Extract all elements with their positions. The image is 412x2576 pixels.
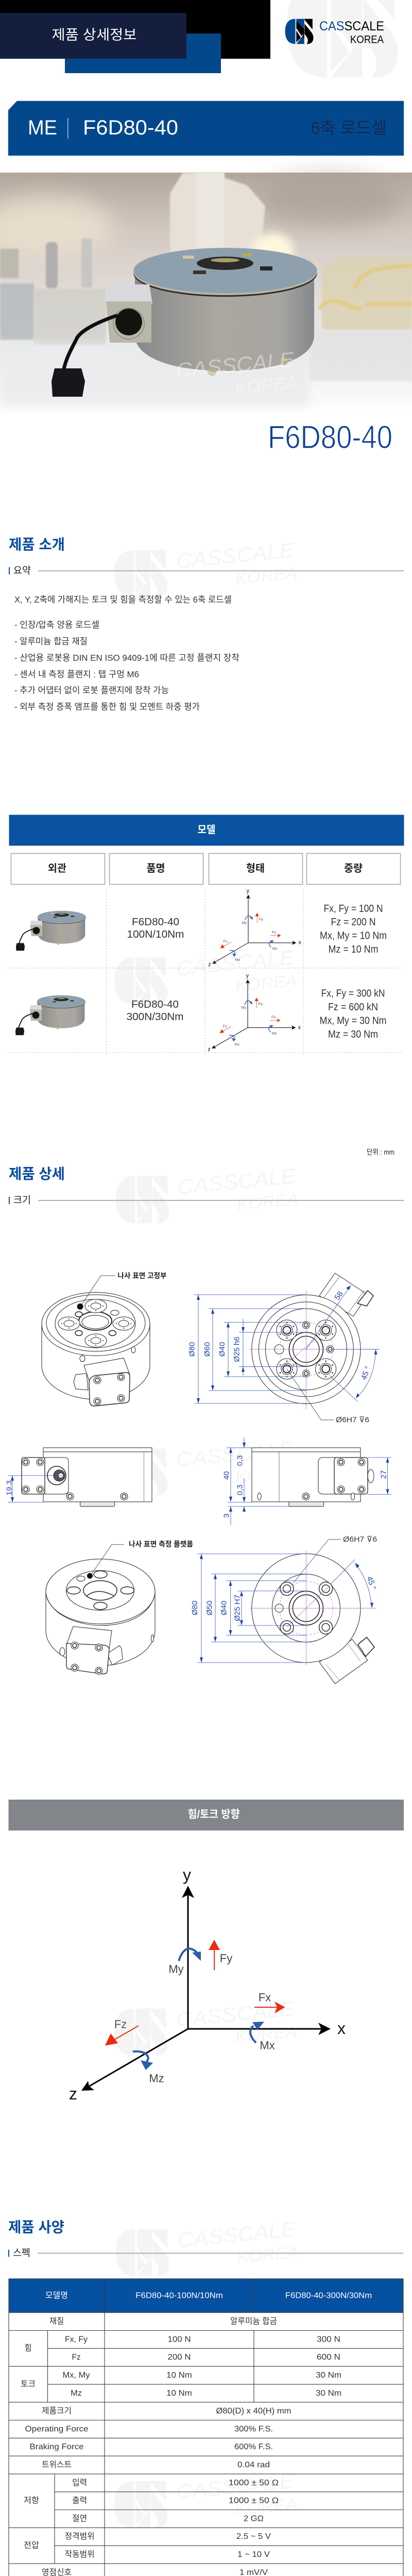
summary text: X, Y, Z축에 가해지는 토크 및 힘을 측정할 수 있는 6축 로드셀 — [14, 595, 232, 605]
model table header cells — [11, 853, 401, 884]
spec rows: resistance and voltage — [24, 2478, 279, 2559]
spec rows: resistance and voltage: 절연 — [72, 2514, 87, 2523]
header title: 제품 상세정보 — [52, 27, 137, 43]
model 1 axis diagram: Mz — [235, 957, 241, 962]
spec rows: resistance and voltage: 1000 ± 50 Ω — [229, 2479, 279, 2487]
brand logo — [285, 19, 384, 45]
spec rows: material and capacity: 토크 — [21, 2380, 36, 2388]
brand logo: KOREA — [350, 34, 384, 45]
background watermarks: CASSCALE — [177, 1165, 297, 1199]
summary text: - 센서 내 측정 플랜지 : 탭 구멍 M6 — [14, 670, 139, 679]
model 2 capacity: Mx, My = 30 Nm — [319, 1015, 386, 1026]
model 1 name — [127, 917, 184, 940]
spec rows: size and mechanical: 300% F.S. — [234, 2425, 273, 2434]
model 2 axis diagram: Fy — [259, 1002, 263, 1006]
spec rows: material and capacity: Fx, Fy — [65, 2335, 88, 2344]
drawing: isometric fixed side — [42, 1272, 167, 1406]
model table dotted grid — [7, 889, 402, 1055]
model 1 axis diagram: Fz — [224, 939, 228, 943]
unit note: 단위 : mm — [367, 1148, 394, 1156]
model 1 thumbnail — [16, 911, 86, 951]
spec rows: material and capacity: 300 N — [317, 2335, 340, 2344]
spec rows: material and capacity: 600 N — [317, 2353, 340, 2362]
force/torque axis diagram: Fz — [114, 2018, 127, 2031]
spec table header: F6D80-40-100N/10Nm — [135, 2292, 223, 2300]
force/torque axis diagram: Mx — [260, 2039, 275, 2052]
model 2 capacity: Mz = 30 Nm — [328, 1029, 378, 1040]
spec rows: material and capacity: 알루미늄 합금 — [230, 2316, 277, 2326]
drawing: bottom view with dimensions: Ø25 H7 — [233, 1595, 242, 1621]
model 2 capacity — [319, 988, 386, 1040]
model 1 axis diagram: Mx — [272, 946, 278, 951]
spec rows: resistance and voltage: 전압 — [24, 2541, 39, 2550]
drawing: top view with dimensions: Ø25 h6 — [233, 1336, 241, 1362]
drawing: top view with dimensions: Ø6H7 ⊽6 — [336, 1416, 369, 1424]
model 2 axis diagram: My — [241, 1005, 246, 1010]
model 1 axis diagram: Fy — [259, 917, 263, 921]
force/torque axis diagram: z — [69, 2084, 77, 2103]
model title bar: 6축 로드셀 — [311, 118, 387, 137]
model 2 capacity: Fz = 600 kN — [328, 1002, 378, 1013]
force/torque axis diagram: x — [337, 2019, 346, 2038]
model 2 axis diagram: Fx — [271, 1015, 276, 1020]
model title bar: F6D80-40 — [83, 116, 178, 139]
spec rows: size and mechanical: Operating Force — [25, 2425, 89, 2434]
spec rows: material and capacity: 200 N — [168, 2353, 191, 2362]
spec table header: 모델명 — [45, 2291, 68, 2300]
spec rows: material and capacity: 30 Nm — [316, 2371, 341, 2380]
drawing: top view with dimensions: Ø40 — [218, 1342, 227, 1357]
hero watermark: CASSCALE — [175, 348, 296, 382]
background watermarks: KOREA — [234, 564, 298, 588]
spec rows: resistance and voltage: 2.5 ~ 5 V — [236, 2532, 271, 2541]
force/torque axis diagram: y — [183, 1866, 191, 1884]
model 1 axis diagram — [208, 888, 302, 968]
drawing: isometric measuring side — [46, 1540, 193, 1674]
background watermarks: CASSCALE — [175, 946, 296, 980]
spec rows: resistance and voltage: 저항 — [24, 2496, 39, 2505]
force/torque direction bar — [8, 1800, 404, 1831]
spec rows: material and capacity: 10 Nm — [166, 2371, 192, 2380]
force/torque axis diagram: Fy — [220, 1952, 232, 1965]
model 1 name: 100N/10Nm — [127, 929, 184, 940]
force/torque axis diagram — [69, 1866, 346, 2103]
model 1 capacity: Fz = 200 N — [331, 917, 376, 928]
spec table header — [9, 2279, 403, 2313]
spec rows: material and capacity: Mz — [71, 2389, 82, 2398]
force/torque direction bar: 힘/토크 방향 — [187, 1808, 240, 1821]
drawing: bottom view with dimensions: 45 ° — [365, 1575, 378, 1591]
force/torque axis diagram: Mz — [149, 2072, 164, 2084]
spec rows: resistance and voltage: 입력 — [72, 2478, 87, 2487]
spec rows: size and mechanical: Braking Force — [30, 2443, 84, 2451]
model 2 name: F6D80-40 — [131, 999, 179, 1010]
force/torque axis diagram: Fx — [259, 1991, 271, 2004]
model table bar: 모델 — [198, 824, 215, 836]
background watermarks — [114, 539, 299, 2576]
label: 나사 표면 측정 플랫폼 — [129, 1540, 193, 1548]
drawing: right side view: 27 — [379, 1470, 388, 1479]
product photo: load cell — [52, 248, 317, 397]
drawing: bottom view with dimensions: Ø80 — [191, 1601, 199, 1615]
model 2 axis diagram: Fz — [223, 1024, 227, 1028]
hero image: industrial plant with load cell — [0, 173, 412, 410]
hero watermark: KOREA — [234, 373, 298, 397]
drawing: right side view: 40 — [222, 1471, 231, 1480]
sub heading: size: 크기 — [13, 1194, 31, 1206]
brand logo: CASSCALE — [319, 19, 384, 33]
spec rows: size and mechanical — [25, 2406, 291, 2469]
background watermarks: KOREA — [234, 2495, 298, 2519]
spec rows: material and capacity: 힘 — [25, 2343, 32, 2352]
background watermarks: KOREA — [234, 2022, 298, 2046]
summary text: - 산업용 로봇용 DIN EN ISO 9409-1에 따른 고정 플랜지 장착 — [14, 653, 239, 663]
model title bar: ME — [28, 116, 57, 139]
model 2 axis diagram: z — [208, 1046, 211, 1053]
model 2 name — [127, 999, 183, 1023]
background watermarks: CASSCALE — [175, 2470, 296, 2504]
model 1 capacity: Fx, Fy = 100 N — [323, 903, 383, 914]
spec rows: resistance and voltage: 1 ~ 10 V — [237, 2550, 270, 2559]
large model name: F6D80-40 — [268, 419, 392, 455]
background watermarks: CASSCALE — [175, 1997, 296, 2031]
drawing: top view with dimensions: Ø60 — [203, 1342, 212, 1357]
background watermarks: CASSCALE — [175, 1437, 296, 1471]
section heading: product spec: 제품 사양 — [8, 2219, 64, 2235]
model table bar — [9, 815, 404, 846]
drawing: top view with dimensions: 58 — [333, 1290, 345, 1302]
spec rows: size and mechanical: 0.04 rad — [237, 2461, 270, 2469]
model table header labels: 중량 — [344, 862, 363, 874]
summary text: - 외부 측정 증폭 앰프를 통한 힘 및 모멘트 하중 평가 — [14, 702, 200, 712]
model title bar — [8, 101, 404, 156]
spec rows: material and capacity: Fz — [72, 2353, 80, 2362]
drawing: bottom view with dimensions — [191, 1535, 378, 1684]
sub heading: summary: 요약 — [13, 565, 31, 576]
model table header labels: 외관 — [48, 862, 66, 874]
drawing: right side view: 0,3 — [236, 1455, 244, 1466]
summary text — [14, 595, 239, 712]
spec rows: material and capacity: 10 Nm — [166, 2389, 192, 2398]
model 2 capacity: Fx, Fy = 300 kN — [321, 988, 385, 999]
spec rows: size and mechanical: 제품크기 — [42, 2406, 72, 2415]
hero watermark — [175, 348, 298, 397]
model 2 axis diagram: x — [298, 1024, 301, 1030]
label: 나사 표면 고정부 — [117, 1272, 167, 1280]
spec rows: material and capacity: 재질 — [49, 2316, 64, 2326]
model 2 axis diagram — [208, 973, 301, 1053]
model 2 name: 300N/30Nm — [127, 1011, 183, 1023]
drawing: top view with dimensions — [187, 1273, 380, 1424]
model table header labels: 품명 — [146, 862, 165, 874]
spec rows: resistance and voltage: 2 GΩ — [244, 2514, 264, 2523]
background watermarks: KOREA — [236, 2243, 299, 2267]
model 1 axis diagram: My — [242, 920, 247, 925]
spec rows: resistance and voltage: 작동범위 — [65, 2550, 95, 2559]
section heading: product detail: 제품 상세 — [9, 1166, 65, 1182]
model 1 axis diagram: x — [299, 940, 302, 946]
model 2 axis diagram: Mx — [272, 1031, 277, 1036]
spec rows: size and mechanical: 트위스트 — [42, 2460, 72, 2469]
sub heading: spec: 스펙 — [13, 2247, 30, 2259]
drawing: right side view — [222, 1437, 391, 1525]
background watermarks: KOREA — [236, 1190, 299, 1214]
drawing: right side view: 3 — [222, 1514, 231, 1518]
spec rows: resistance and voltage: 1000 ± 50 Ω — [229, 2497, 279, 2505]
spec rows: performance — [34, 2568, 286, 2576]
model 1 capacity — [320, 903, 387, 955]
summary text: - 알루미늄 합금 재질 — [14, 637, 88, 646]
section heading: product intro: 제품 소개 — [9, 537, 65, 552]
drawing: top view with dimensions: Ø80 — [187, 1342, 197, 1357]
model table header labels — [48, 862, 363, 874]
background watermarks: CASSCALE — [175, 539, 296, 573]
model 2 axis diagram: Mz — [235, 1042, 240, 1046]
background watermarks: KOREA — [234, 971, 298, 995]
drawing: bottom view with dimensions: Ø6H7 ⊽6 — [343, 1535, 377, 1544]
drawing: right side view: 0,3 — [236, 1485, 244, 1495]
drawing: left side view — [5, 1448, 152, 1506]
spec table header: F6D80-40-300N/30Nm — [285, 2292, 372, 2300]
spec rows: size and mechanical: Ø80(D) x 40(H) mm — [216, 2407, 291, 2415]
spec rows: resistance and voltage: 정격범위 — [65, 2532, 95, 2541]
spec rows: material and capacity — [21, 2316, 341, 2398]
model 1 capacity: Mx, My = 10 Nm — [320, 930, 387, 942]
summary text: - 추가 어댑터 없이 로봇 플랜지에 장착 가능 — [14, 685, 169, 696]
model table header labels: 형태 — [246, 862, 265, 874]
header band — [0, 0, 270, 73]
model 2 thumbnail — [15, 995, 85, 1035]
model 1 name: F6D80-40 — [132, 917, 179, 928]
spec rows: material and capacity: Mx, My — [63, 2371, 90, 2380]
brand watermark logo — [287, 0, 398, 77]
drawing: bottom view with dimensions: Ø40 — [219, 1601, 229, 1615]
drawing: bottom view with dimensions: Ø50 — [205, 1601, 214, 1615]
model 1 axis diagram: Fx — [272, 930, 277, 935]
spec rows: material and capacity: 30 Nm — [316, 2389, 341, 2398]
model 2 axis diagram: y — [246, 973, 249, 979]
force/torque axis diagram: My — [168, 1963, 184, 1975]
model 1 capacity: Mz = 10 Nm — [329, 944, 378, 955]
drawing: left side view: 19.3 — [5, 1480, 13, 1496]
spec rows: size and mechanical: 600% F.S. — [234, 2443, 273, 2451]
model 1 axis diagram: y — [247, 888, 250, 894]
background watermarks: KOREA — [234, 1462, 298, 1486]
spec rows: material and capacity: 100 N — [168, 2335, 191, 2344]
spec rows: resistance and voltage: 출력 — [72, 2496, 87, 2505]
summary text: - 인장/압축 양용 로드셀 — [14, 620, 99, 630]
spec table — [9, 2279, 403, 2576]
drawing: top view with dimensions: 45 ° — [359, 1365, 372, 1381]
background watermarks: CASSCALE — [177, 2218, 297, 2252]
model 1 axis diagram: z — [208, 961, 211, 968]
